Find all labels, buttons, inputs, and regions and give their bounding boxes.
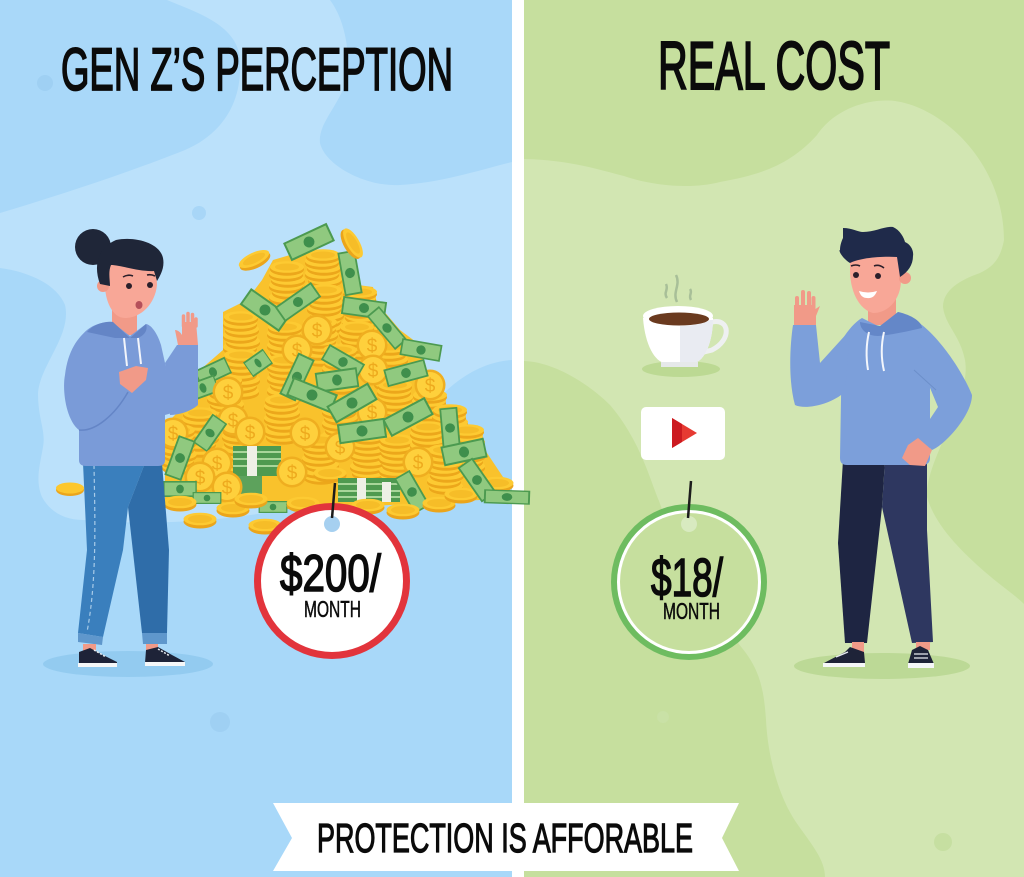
figure: smiling man in hoodie <box>790 227 972 679</box>
cash bundle: lower <box>338 478 400 502</box>
illustration: pile of coins and cash: $ <box>368 361 379 382</box>
head <box>850 255 901 313</box>
price tag: $18/month <box>614 481 764 657</box>
price tag: $18/month: $18/ <box>651 548 723 608</box>
price tag: $200/month: MONTH <box>304 596 361 622</box>
illustration: pile of coins and cash <box>56 223 530 535</box>
hip hand <box>902 438 932 466</box>
cash bundle: upper <box>233 446 281 494</box>
illustration: pile of coins and cash: $ <box>367 336 378 357</box>
hoodie body <box>840 312 930 465</box>
neck <box>112 310 137 335</box>
illustration: pile of coins and cash: $ <box>168 424 179 445</box>
price tag: $18/month: MONTH <box>663 598 720 624</box>
illustration: pile of coins and cash: $ <box>300 424 311 445</box>
illustration: pile of coins and cash: $ <box>413 453 424 474</box>
figure: surprised woman in hoodie <box>43 229 213 677</box>
illustration: pile of coins and cash: $ <box>292 341 303 362</box>
raised hand <box>794 292 820 325</box>
trousers <box>838 460 885 643</box>
jeans <box>78 463 145 637</box>
illustration: pile of coins and cash: $ <box>245 423 256 444</box>
shoes <box>79 648 117 664</box>
price tag: $200/month <box>258 483 406 656</box>
illustration: pile of coins and cash: $ <box>195 468 206 489</box>
shoes <box>824 647 865 663</box>
head <box>105 262 157 318</box>
raised hand <box>175 314 198 345</box>
bent sleeve <box>910 318 972 450</box>
illustration: pile of coins and cash: $ <box>212 454 223 475</box>
neck <box>868 295 896 325</box>
illustration: pile of coins and cash: $ <box>222 478 233 499</box>
ankles <box>852 642 930 652</box>
hoodie body and left arm <box>64 322 172 466</box>
raised sleeve <box>790 325 850 407</box>
banner: Protection is affordable: PROTECTION IS AFFORABLE <box>317 815 693 861</box>
illustration: pile of coins and cash: $ <box>228 411 239 432</box>
panel: right background <box>524 0 1024 877</box>
illustration: pile of coins and cash: $ <box>367 403 378 424</box>
chest hand <box>119 366 148 393</box>
illustration: pile of coins and cash: $ <box>425 376 436 397</box>
icon: video play card <box>641 407 725 460</box>
illustration: pile of coins and cash: $ <box>287 463 298 484</box>
illustration: pile of coins and cash: $ <box>223 383 234 404</box>
banner: Protection is affordable <box>273 803 739 871</box>
price tag: $200/month: $200/ <box>280 545 381 603</box>
illustration: pile of coins and cash: $ <box>335 438 346 459</box>
panel: left background <box>0 0 512 877</box>
icon: coffee cup <box>642 275 726 377</box>
illustration: pile of coins and cash: $ <box>312 321 323 342</box>
title: Gen Z's Perception: GEN Z’S PERCEPTION <box>61 36 453 103</box>
hoodie right sleeve <box>165 345 198 415</box>
ankles <box>83 644 158 652</box>
